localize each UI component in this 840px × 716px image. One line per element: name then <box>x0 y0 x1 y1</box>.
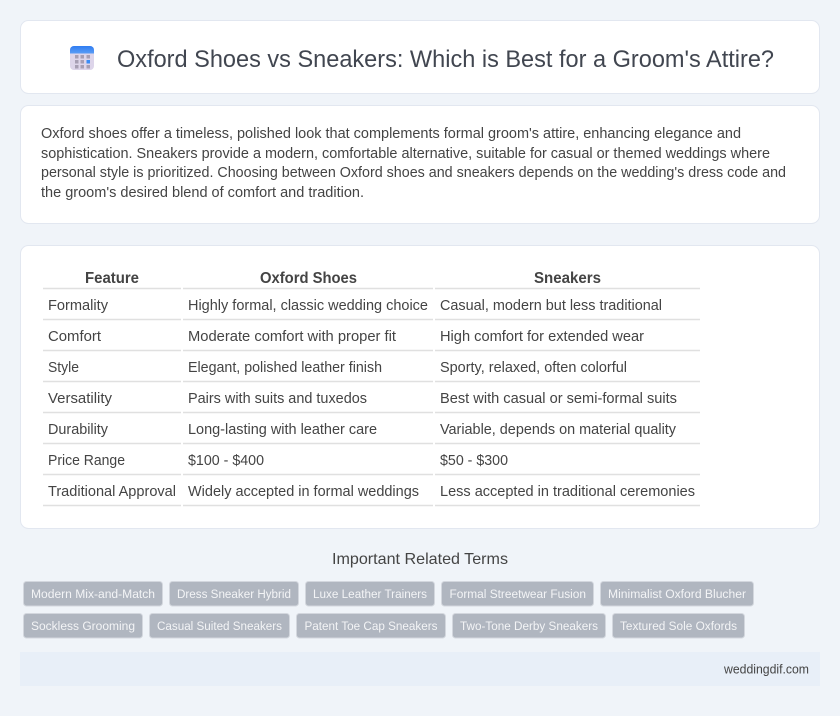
related term tags: Minimalist Oxford Blucher <box>608 587 746 601</box>
table header: Sneakers <box>534 270 601 287</box>
table row: Style: Elegant, polished leather finish <box>188 360 382 376</box>
table row: Comfort: Comfort <box>48 329 101 345</box>
table row: Style: Style <box>48 360 79 376</box>
table row: Traditional Approval: Traditional Approval <box>48 484 176 500</box>
intro paragraph: personal style is prioritized. Choosing between Oxford shoes and sneakers depends on the wedding's dress code and <box>41 165 786 181</box>
table row: Formality: Casual, modern but less traditional <box>440 298 662 314</box>
table row: Price Range <box>48 453 508 469</box>
related term tags: Modern Mix-and-Match <box>31 587 155 601</box>
icon: calendar <box>70 46 94 70</box>
intro paragraph <box>41 126 786 201</box>
table row: Durability <box>48 422 677 438</box>
panel: header <box>20 20 820 94</box>
table row: Versatility: Best with casual or semi-formal suits <box>440 391 677 407</box>
table row: Style <box>48 360 627 376</box>
table row: Price Range: $100 - $400 <box>188 453 264 469</box>
table row: Traditional Approval: Widely accepted in formal weddings <box>188 484 419 500</box>
intro paragraph: Oxford shoes offer a timeless, polished look that complements formal groom's attire, enhancing elegance and <box>41 126 741 142</box>
related term tags: Luxe Leather Trainers <box>313 587 427 601</box>
table row: Style: Sporty, relaxed, often colorful <box>440 360 627 376</box>
footer: weddingdif.com <box>723 662 809 676</box>
title: Oxford Shoes vs Sneakers: Which is Best for a Groom's Attire? <box>117 46 774 73</box>
table header: Feature <box>85 270 139 287</box>
table row: Formality <box>48 298 662 314</box>
table row: Versatility: Pairs with suits and tuxedos <box>188 391 367 407</box>
table row: Price Range: Price Range <box>48 453 125 469</box>
panel: intro text <box>20 106 820 224</box>
table row: Comfort: High comfort for extended wear <box>440 329 644 345</box>
related term tags: Casual Suited Sneakers <box>157 619 282 633</box>
heading: related terms: Important Related Terms <box>332 551 508 568</box>
table row: Price Range: $50 - $300 <box>440 453 508 469</box>
related term tags: Sockless Grooming <box>31 619 135 633</box>
table row: Durability: Variable, depends on material quality <box>440 422 677 438</box>
table row: Versatility: Versatility <box>48 391 113 407</box>
intro paragraph: the groom's desired blend of comfort and tradition. <box>41 185 364 201</box>
related term tags: Textured Sole Oxfords <box>620 619 737 633</box>
table row: Formality: Highly formal, classic wedding choice <box>188 298 428 314</box>
table row: Durability: Long-lasting with leather care <box>188 422 377 438</box>
table row: Traditional Approval <box>48 484 695 500</box>
table row: Formality: Formality <box>48 298 109 314</box>
intro paragraph: sophistication. Sneakers provide a modern, comfortable alternative, suitable for casual or themed weddings where <box>41 146 770 162</box>
footer <box>20 652 820 686</box>
panel: comparison table <box>20 246 820 528</box>
table header <box>85 270 601 287</box>
related term tags <box>24 582 754 638</box>
related term tags: Two-Tone Derby Sneakers <box>460 619 598 633</box>
table row: Durability: Durability <box>48 422 109 438</box>
table row: Traditional Approval: Less accepted in traditional ceremonies <box>440 484 695 500</box>
table header: Oxford Shoes <box>260 270 357 287</box>
related term tags: Dress Sneaker Hybrid <box>177 587 291 601</box>
table row: Versatility <box>48 391 677 407</box>
related term tags: Formal Streetwear Fusion <box>450 587 586 601</box>
related term tags: Patent Toe Cap Sneakers <box>304 619 438 633</box>
table row: Comfort: Moderate comfort with proper fit <box>188 329 396 345</box>
table row: Comfort <box>48 329 644 345</box>
